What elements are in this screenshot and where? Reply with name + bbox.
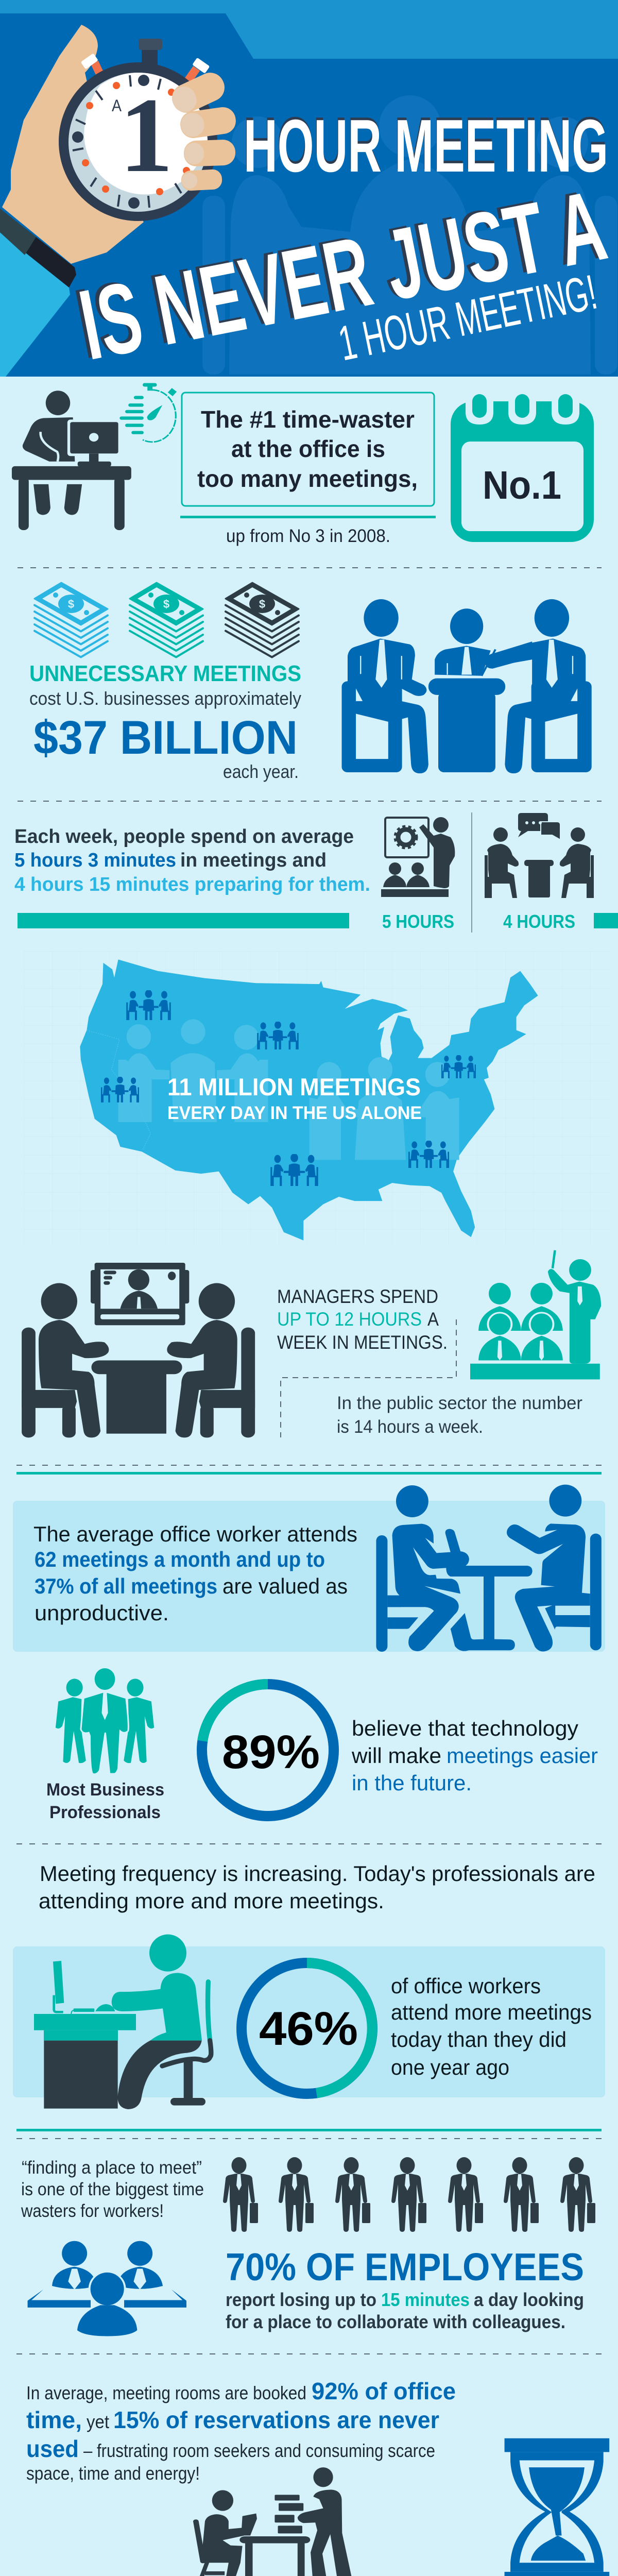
icon: small meeting west (101, 1076, 139, 1103)
centre person (435, 608, 491, 676)
icon: people with books (196, 2467, 353, 2576)
panel: most business professionals (46, 1668, 598, 1822)
text: meeting rooms booked: used (26, 2435, 79, 2462)
icon: money stack blue (35, 583, 108, 657)
text: average office worker: 37% of all meetings (35, 1574, 217, 1598)
pointing hand (485, 641, 532, 669)
map label (167, 1073, 422, 1123)
text: managers spend: MANAGERS SPEND (277, 1286, 438, 1307)
text: believe technology: believe that technology (352, 1716, 578, 1740)
right person (167, 1283, 255, 1437)
text: believe technology: meetings easier (447, 1743, 598, 1768)
callout box: top time waster: too many meetings, (197, 465, 418, 492)
text: each week: Each week, people spend on average (14, 826, 354, 848)
panel: number one time waster (12, 383, 594, 546)
panel: us map (24, 951, 610, 1245)
donut: 46 percent: 46% (259, 2003, 358, 2055)
text: each week: 4 hours 15 minutes preparing for them. (14, 874, 370, 895)
callout box: top time waster (182, 393, 434, 506)
text: office workers: one year ago (391, 2055, 509, 2079)
label: most business professionals (46, 1780, 164, 1822)
text: report losing: report losing up to (226, 2289, 376, 2310)
text: report losing: a day looking (474, 2289, 584, 2310)
text: average office worker: The average office worker attends (33, 1522, 357, 1546)
text: public sector (337, 1393, 582, 1437)
text: finding a place to meet: is one of the biggest time (21, 2179, 204, 2199)
panel: weekly hours (14, 812, 618, 933)
text: office workers (391, 1974, 592, 2079)
text: believe technology (351, 1716, 598, 1795)
callout box: top time waster: at the office is (231, 435, 385, 462)
panel: managers (22, 1250, 601, 1437)
text: managers spend (277, 1286, 448, 1353)
text: public sector: In the public sector the number (337, 1393, 582, 1413)
hand (2, 25, 144, 264)
panel: unnecessary meetings cost (29, 583, 592, 782)
icon: small meeting southeast (408, 1140, 449, 1168)
text: meeting frequency (39, 1861, 595, 1913)
bar: four hours (594, 913, 618, 928)
icon: small meeting central (257, 1021, 299, 1049)
stopwatch numeral 1: 1 (119, 76, 173, 194)
icon: presenter with gear board (381, 817, 455, 897)
icon: money stack dark: $ (259, 598, 265, 611)
label: most business professionals: Most Business (46, 1780, 164, 1800)
text: office workers: attend more meetings (391, 2000, 592, 2024)
text: up from no 3: up from No 3 in 2008. (226, 526, 390, 546)
text: meeting rooms booked: time, (26, 2406, 82, 2433)
sleeve (0, 209, 76, 377)
icon: small meeting east (441, 1055, 476, 1078)
icon: person at desk (12, 391, 131, 530)
text: meeting rooms booked: space, time and energy! (26, 2463, 200, 2484)
stopwatch (59, 39, 217, 221)
text: meeting frequency: attending more and more meetings. (39, 1889, 384, 1913)
icon: two people with speech bubbles (485, 813, 594, 898)
text: each week: in meetings and (180, 850, 327, 871)
text: meeting rooms booked: 15% of reservations are never (113, 2406, 439, 2433)
icon: hourglass (505, 2438, 609, 2576)
icon: two people at table (376, 1485, 602, 1652)
donut: 89 percent (202, 1684, 334, 1816)
icon: small meeting south (270, 1154, 318, 1186)
text: meeting rooms booked: – frustrating room seekers and consuming scarce (83, 2440, 435, 2461)
header panel (0, 0, 618, 382)
map label: EVERY DAY IN THE US ALONE (167, 1103, 422, 1123)
faint meeting silhouettes (118, 1019, 459, 1160)
panel: meeting rooms (26, 2378, 609, 2576)
text: average office worker: unproductive. (35, 1601, 169, 1625)
text: managers spend: A (427, 1309, 439, 1330)
icon: three people meeting (342, 599, 592, 773)
big number: 37 billion: $37 BILLION (33, 711, 298, 764)
text: public sector: is 14 hours a week. (337, 1417, 483, 1437)
text: finding a place to meet: wasters for workers! (21, 2201, 164, 2221)
fingers (167, 68, 237, 191)
donut: 46 percent (242, 1963, 372, 2094)
text: average office worker: are valued as (222, 1574, 348, 1598)
text: average office worker: 62 meetings a month and up to (35, 1547, 325, 1571)
heading: 70 percent of employees: 70% OF EMPLOYEES (226, 2245, 584, 2289)
donut: 89 percent: 89% (222, 1726, 320, 1778)
label: 5 hours: 5 HOURS (382, 911, 454, 932)
text: managers spend: UP TO 12 HOURS (277, 1309, 422, 1330)
text: meeting rooms booked (26, 2378, 456, 2484)
text: believe technology: will make (351, 1743, 441, 1768)
stopwatch letter A: A (112, 96, 122, 115)
text: finding a place to meet (21, 2158, 204, 2221)
text: managers spend: WEEK IN MEETINGS. (277, 1332, 448, 1353)
divider rule (180, 516, 436, 518)
text: office workers: of office workers (391, 1974, 541, 1998)
table (92, 1360, 182, 1434)
text: each year: each year. (223, 761, 299, 782)
icon: presenter with audience (470, 1250, 601, 1379)
text: meeting rooms booked: 92% of office (312, 2378, 456, 2404)
text: office workers: today than they did (391, 2027, 566, 2052)
text: meeting frequency: Meeting frequency is increasing. Today's professionals are (40, 1861, 595, 1886)
text: report losing: 15 minutes (381, 2289, 470, 2310)
icon: stopwatch speed (122, 383, 177, 442)
text: average office worker (33, 1522, 357, 1625)
callout box: top time waster: The #1 time-waster (201, 406, 415, 433)
panel: 46 percent (13, 1935, 605, 2109)
left seated person (342, 599, 428, 773)
state lines (87, 1030, 150, 1150)
icon: three professionals (56, 1668, 154, 1774)
icon: three people at desks (28, 2241, 186, 2336)
panel: average office worker (13, 1485, 605, 1652)
icon: money stack teal: $ (163, 598, 169, 611)
panel: finding a place (21, 2157, 595, 2336)
icon: money stack dark (226, 583, 299, 657)
text: meeting rooms booked: yet (87, 2411, 109, 2432)
icon: money stack teal (130, 583, 203, 657)
icon: worker at computer (34, 1935, 211, 2109)
label: 4 hours: 4 HOURS (503, 911, 575, 932)
icon: calendar no.1: No.1 (483, 463, 561, 507)
table (428, 679, 505, 772)
text: report losing (226, 2289, 584, 2332)
icon row: seven employees (223, 2157, 595, 2232)
map: united states (80, 959, 538, 1241)
icon: two people and video screen (22, 1263, 255, 1437)
left person (22, 1283, 109, 1437)
map label: 11 MILLION MEETINGS (167, 1073, 421, 1100)
text: cost: cost U.S. businesses approximately (29, 688, 301, 709)
text: believe technology: in the future. (352, 1771, 472, 1795)
text: finding a place to meet: “finding a place to meet” (22, 2158, 202, 2178)
text: each week: 5 hours 3 minutes (14, 850, 176, 871)
text: each week (14, 826, 370, 895)
header background silhouettes (202, 95, 617, 375)
heading: unnecessary meetings: UNNECESSARY MEETINGS (29, 661, 301, 686)
label: most business professionals: Professionals (49, 1803, 161, 1822)
text: report losing: for a place to collaborate with colleagues. (226, 2311, 565, 2332)
icon: money stack blue: $ (68, 598, 74, 611)
bar: five hours (18, 913, 349, 928)
text: meeting rooms booked: In average, meeting rooms are booked (26, 2382, 306, 2403)
right seated person (488, 599, 592, 773)
icon: small meeting northwest (126, 990, 171, 1020)
icon: calendar no.1 (451, 394, 594, 542)
